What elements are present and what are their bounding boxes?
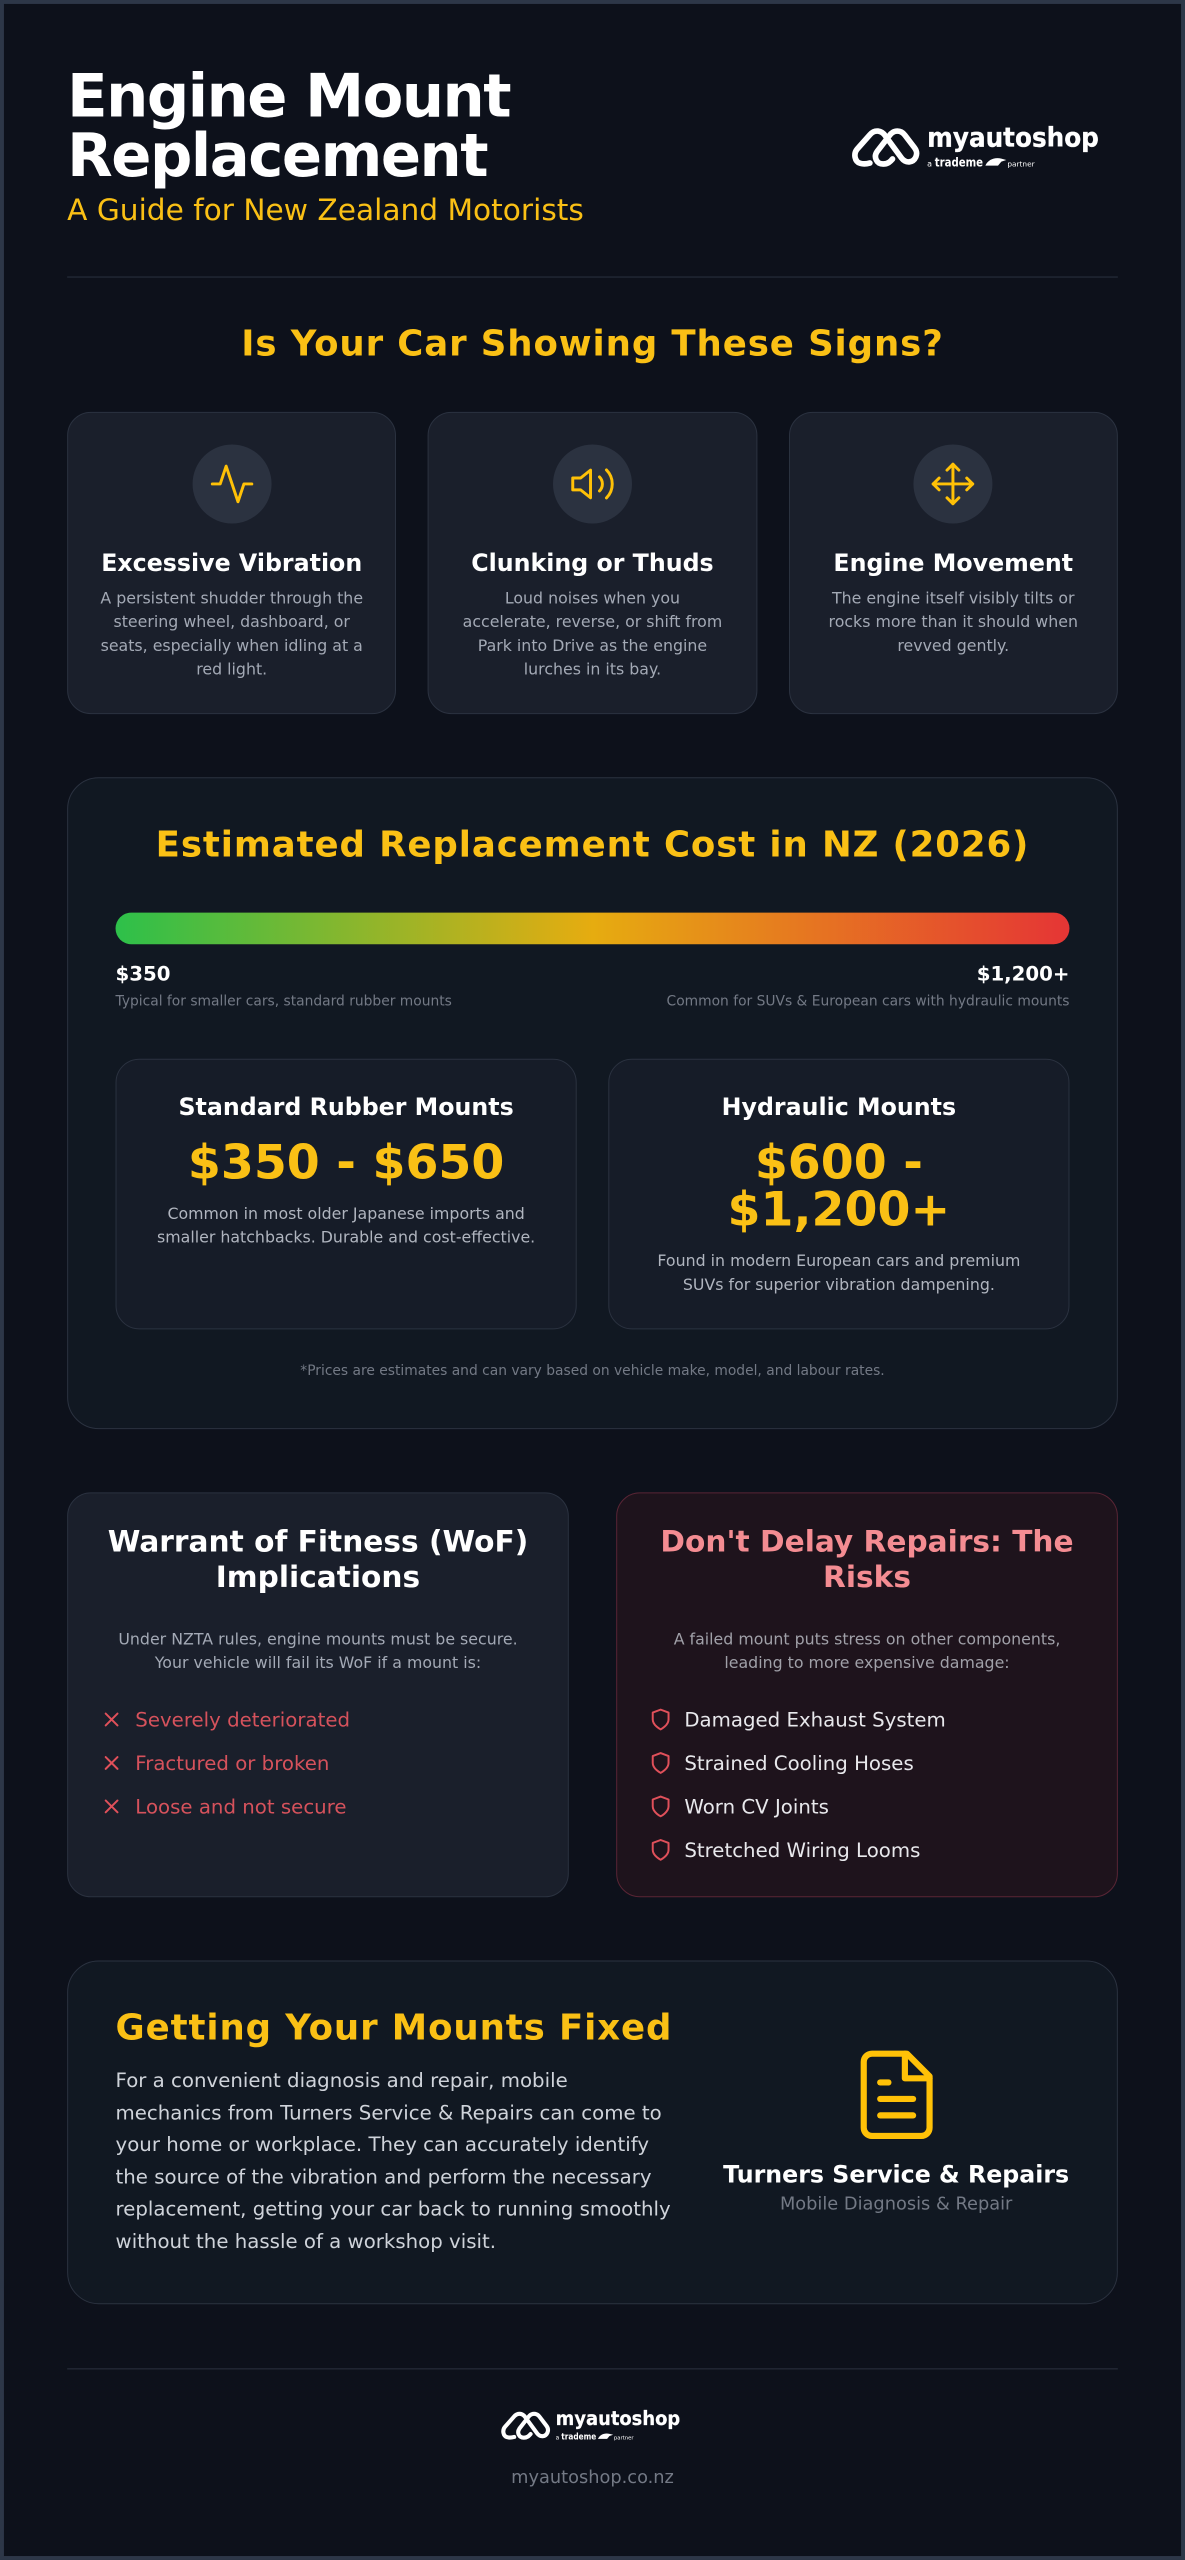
service subtitle: Mobile Diagnosis & Repair: [780, 2194, 1012, 2214]
WoF text: Under NZTA rules, engine mounts must be secure. Your vehicle will fail its WoF if a mount is:: [118, 1630, 518, 1672]
logo: myautoshop footer: trademe: [561, 2432, 596, 2442]
fixed heading: Getting Your Mounts Fixed: [116, 2008, 672, 2048]
icon: speaker: [553, 444, 632, 523]
panel: getting fixed: [67, 1960, 1118, 2304]
price: $350 - $650: [188, 1135, 504, 1190]
icon: move arrows: [914, 444, 993, 523]
mount title: Hydraulic Mounts: [722, 1093, 956, 1121]
card: standard rubber mounts: [116, 1059, 577, 1329]
subtitle: A Guide for New Zealand Motorists: [67, 194, 584, 228]
footer divider: [67, 2367, 1118, 2370]
label: low cost: Typical for smaller cars, standard rubber mounts: [116, 994, 452, 1009]
WoF item: Severely deteriorated: [135, 1708, 350, 1731]
risks heading: Don't Delay Repairs: The Risks: [660, 1525, 1074, 1595]
icon: pulse: [192, 444, 271, 523]
card: engine movement: [789, 412, 1118, 714]
footnote: *Prices are estimates and can vary based on vehicle make, model, and labour rates.: [300, 1363, 885, 1379]
logo: myautoshop footer: myautoshop: [555, 2406, 680, 2429]
logo: myautoshop header: [852, 123, 1099, 170]
mount title: Standard Rubber Mounts: [178, 1093, 514, 1121]
logo: myautoshop header: partner: [1008, 160, 1035, 169]
WoF heading: Warrant of Fitness (WoF) Implications: [108, 1525, 528, 1595]
footer url: myautoshop.co.nz: [511, 2467, 674, 2488]
label: high cost: Common for SUVs & European cars with hydraulic mounts: [667, 994, 1069, 1009]
gradient cost bar: [116, 913, 1069, 944]
panel: risks: [616, 1492, 1118, 1897]
panel: WoF: [67, 1492, 569, 1897]
logo: myautoshop header: a: [928, 160, 933, 169]
card title: Excessive Vibration: [101, 549, 362, 576]
title: Engine Mount: [67, 62, 510, 131]
card: excessive vibration: [67, 412, 396, 714]
logo: myautoshop header: myautoshop: [928, 123, 1099, 154]
logo: myautoshop footer: [501, 2406, 680, 2442]
card: hydraulic mounts: [608, 1059, 1069, 1329]
fixed text: [116, 2068, 671, 2252]
fixed text: without the hassle of a workshop visit.: [116, 2229, 496, 2252]
price: $600 - $1,200+: [728, 1135, 950, 1238]
risk item: Stretched Wiring Looms: [684, 1838, 920, 1862]
logo: myautoshop header: trademe: [935, 156, 983, 170]
label: low cost: $350: [116, 962, 171, 986]
fixed text: your home or workplace. They can accurately identify: [116, 2132, 649, 2156]
logo: myautoshop footer: a: [555, 2435, 559, 2441]
service name: Turners Service & Repairs: [723, 2161, 1069, 2189]
label: high cost: [667, 962, 1069, 1009]
title: Replacement: [67, 121, 487, 191]
heading: signs: Is Your Car Showing These Signs?: [241, 324, 944, 364]
risks text: A failed mount puts stress on other components, leading to more expensive damage:: [674, 1630, 1060, 1672]
header divider: [67, 276, 1118, 279]
label: low cost: [116, 962, 452, 1009]
fixed text: replacement, getting your car back to running smoothly: [116, 2197, 671, 2220]
label: high cost: $1,200+: [977, 962, 1069, 986]
risk item: Strained Cooling Hoses: [684, 1751, 914, 1775]
card: clunking: [428, 412, 757, 714]
risk item: Worn CV Joints: [684, 1795, 829, 1818]
service block: [723, 2050, 1069, 2214]
mount text: Common in most older Japanese imports and smaller hatchbacks. Durable and cost-effective.: [157, 1204, 535, 1246]
panel: cost: [67, 777, 1118, 1429]
icon: document: [860, 2050, 933, 2139]
WoF item: Fractured or broken: [135, 1751, 329, 1775]
WoF item: Loose and not secure: [135, 1795, 347, 1818]
risk item: Damaged Exhaust System: [684, 1708, 946, 1731]
card title: Engine Movement: [833, 549, 1073, 576]
card text: A persistent shudder through the steering wheel, dashboard, or seats, especially when idling at a red light.: [100, 588, 363, 678]
card text: The engine itself visibly tilts or rocks more than it should when revved gently.: [829, 588, 1078, 654]
card text: Loud noises when you accelerate, reverse, or shift from Park into Drive as the engine lurches in its bay.: [463, 588, 722, 678]
fixed text: mechanics from Turners Service & Repairs can come to: [116, 2100, 662, 2124]
cost heading: Estimated Replacement Cost in NZ (2026): [156, 825, 1029, 865]
logo: myautoshop footer: partner: [613, 2435, 634, 2441]
fixed text: For a convenient diagnosis and repair, mobile: [116, 2068, 568, 2092]
fixed text: the source of the vibration and perform the necessary: [116, 2164, 652, 2188]
title: [67, 62, 510, 191]
card title: Clunking or Thuds: [471, 549, 714, 576]
mount text: Found in modern European cars and premium SUVs for superior vibration dampening.: [657, 1251, 1020, 1294]
